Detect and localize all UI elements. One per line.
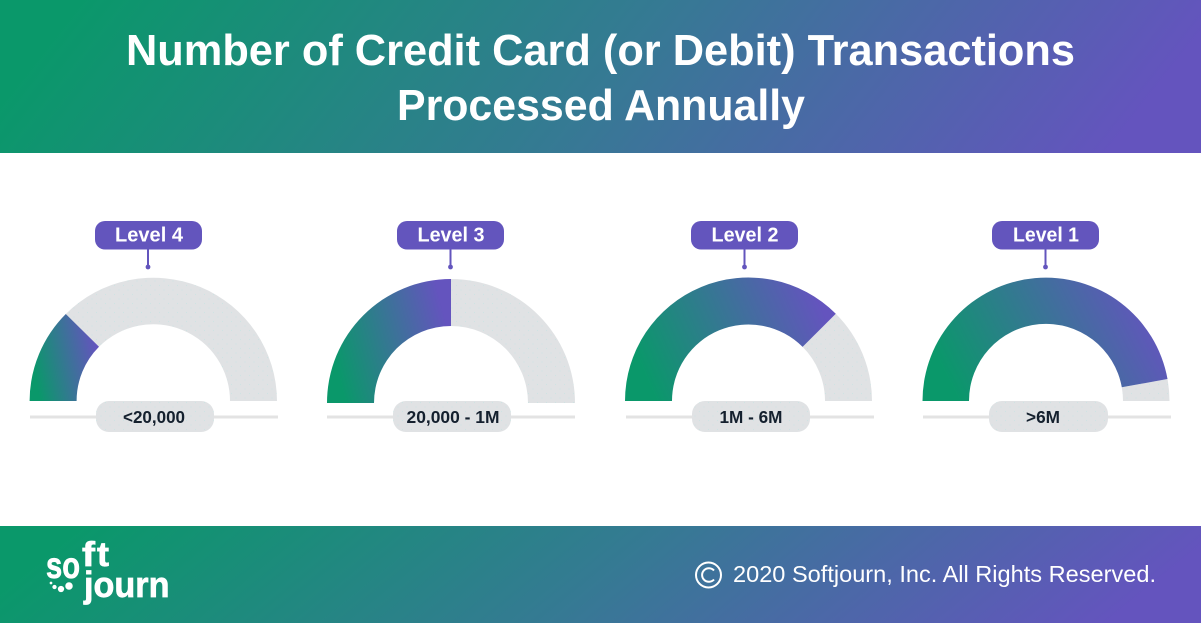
range pill: Level 4 (96, 401, 214, 432)
level badge: Level 2 (691, 221, 798, 269)
gauge: Level 1 (922, 221, 1171, 432)
level badge: Level 1 (992, 221, 1099, 269)
header banner (0, 0, 1201, 153)
level badge: Level 3 (397, 221, 504, 269)
gauge fill: Level 4 (30, 314, 99, 401)
range pill: Level 1: >6M (1026, 407, 1060, 427)
gauge fill: Level 1 (922, 278, 1168, 401)
gauge track: Level 1 (1122, 379, 1170, 401)
logo: Softjourn (46, 536, 170, 605)
range pill: Level 4: <20,000 (123, 407, 185, 427)
title: Processed Annually (397, 81, 806, 130)
logo: Softjourn: f (82, 536, 96, 574)
level badge: Level 4 (95, 221, 202, 269)
gauge fill: Level 3 (327, 279, 451, 403)
logo: Softjourn: t (97, 536, 109, 574)
logo: Softjourn: journ (83, 564, 170, 605)
gauge track: Level 3 (451, 279, 575, 403)
gauge fill: Level 2 (625, 278, 836, 401)
range pill: Level 3 (393, 401, 511, 432)
range pill: Level 2: 1M - 6M (720, 407, 782, 427)
level badge: Level 3: Level 3 (418, 224, 484, 246)
gauge track: Level 2 (803, 314, 872, 401)
baseline: Level 3 (327, 416, 575, 418)
gauge: Level 3 (327, 221, 575, 432)
title: Number of Credit Card (or Debit) Transactions (126, 26, 1075, 75)
baseline: Level 2 (626, 416, 874, 418)
level badge: Level 2: Level 2 (712, 224, 778, 246)
footer banner (0, 526, 1201, 623)
range pill: Level 1 (989, 401, 1108, 432)
range pill: Level 3: 20,000 - 1M (406, 407, 500, 427)
logo: Softjourn: so (46, 545, 80, 586)
baseline: Level 1 (923, 416, 1171, 418)
gauge: Level 2 (625, 221, 874, 432)
level badge: Level 4: Level 4 (115, 224, 184, 246)
range pill: Level 2 (692, 401, 810, 432)
gauge: Level 4 (30, 221, 278, 432)
baseline: Level 4 (30, 416, 278, 418)
copyright text: 2020 Softjourn, Inc. All Rights Reserved. (733, 561, 1156, 587)
gauge track: Level 4 (66, 278, 277, 401)
level badge: Level 1: Level 1 (1013, 224, 1079, 246)
copyright icon (696, 562, 721, 588)
